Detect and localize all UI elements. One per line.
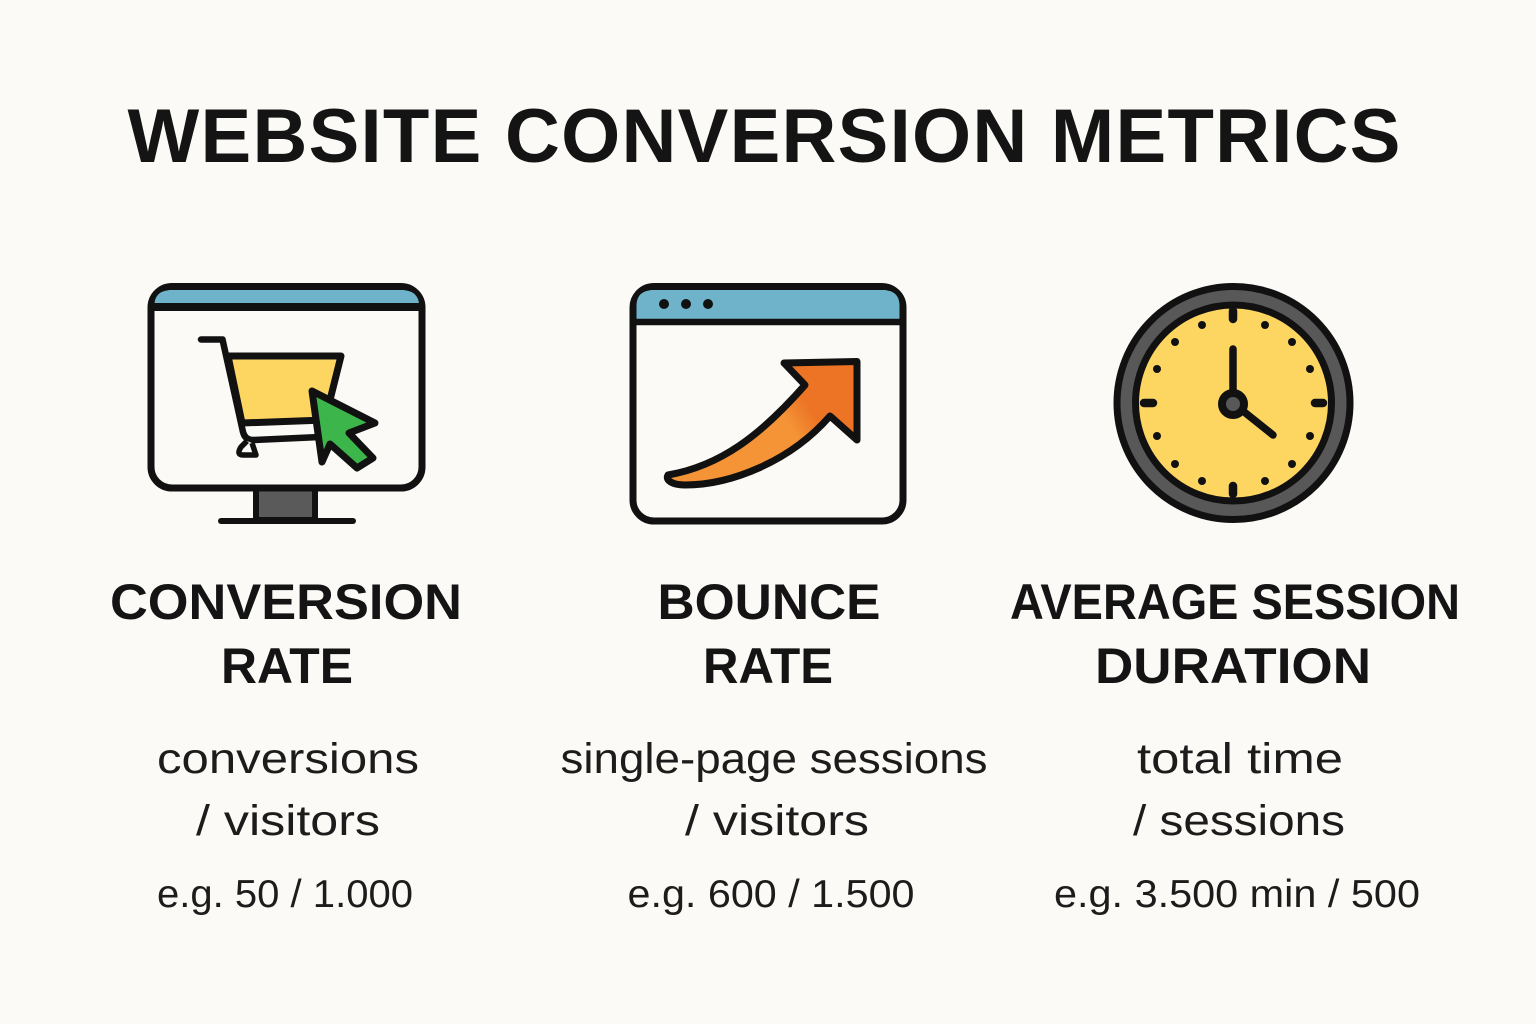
formula: bounce rate xyxy=(560,735,988,845)
panel: bounce rate xyxy=(560,286,988,916)
formula: conversion rate: conversions xyxy=(157,735,419,783)
formula: bounce rate: / visitors xyxy=(685,797,869,845)
heading: bounce rate: RATE xyxy=(703,638,833,694)
title: WEBSITE CONVERSION METRICS xyxy=(128,94,1400,179)
heading: average session duration: DURATION xyxy=(1095,638,1371,694)
icon: wall clock xyxy=(1117,286,1350,520)
heading: average session duration xyxy=(1010,574,1460,694)
heading: conversion rate: CONVERSION xyxy=(110,574,462,630)
panel: conversion rate xyxy=(110,286,462,916)
example: bounce rate: e.g. 600 / 1.500 xyxy=(628,873,914,916)
icon: browser window with rising arrow xyxy=(633,286,903,521)
heading: conversion rate: RATE xyxy=(221,638,353,694)
heading: average session duration: AVERAGE SESSION xyxy=(1010,574,1460,630)
heading: bounce rate xyxy=(658,574,880,694)
formula: average session duration xyxy=(1133,735,1345,845)
heading: bounce rate: BOUNCE xyxy=(658,574,880,630)
formula: conversion rate: / visitors xyxy=(196,797,380,845)
example: average session duration: e.g. 3.500 min / 500 xyxy=(1054,873,1420,916)
icon: monitor with shopping cart and cursor xyxy=(151,286,422,521)
formula: bounce rate: single-page sessions xyxy=(560,735,988,783)
heading: conversion rate xyxy=(110,574,462,694)
example: conversion rate: e.g. 50 / 1.000 xyxy=(157,873,413,916)
formula: average session duration: / sessions xyxy=(1133,797,1345,845)
formula: average session duration: total time xyxy=(1137,735,1343,783)
panel: average session duration xyxy=(1010,286,1460,916)
formula: conversion rate xyxy=(157,735,419,845)
